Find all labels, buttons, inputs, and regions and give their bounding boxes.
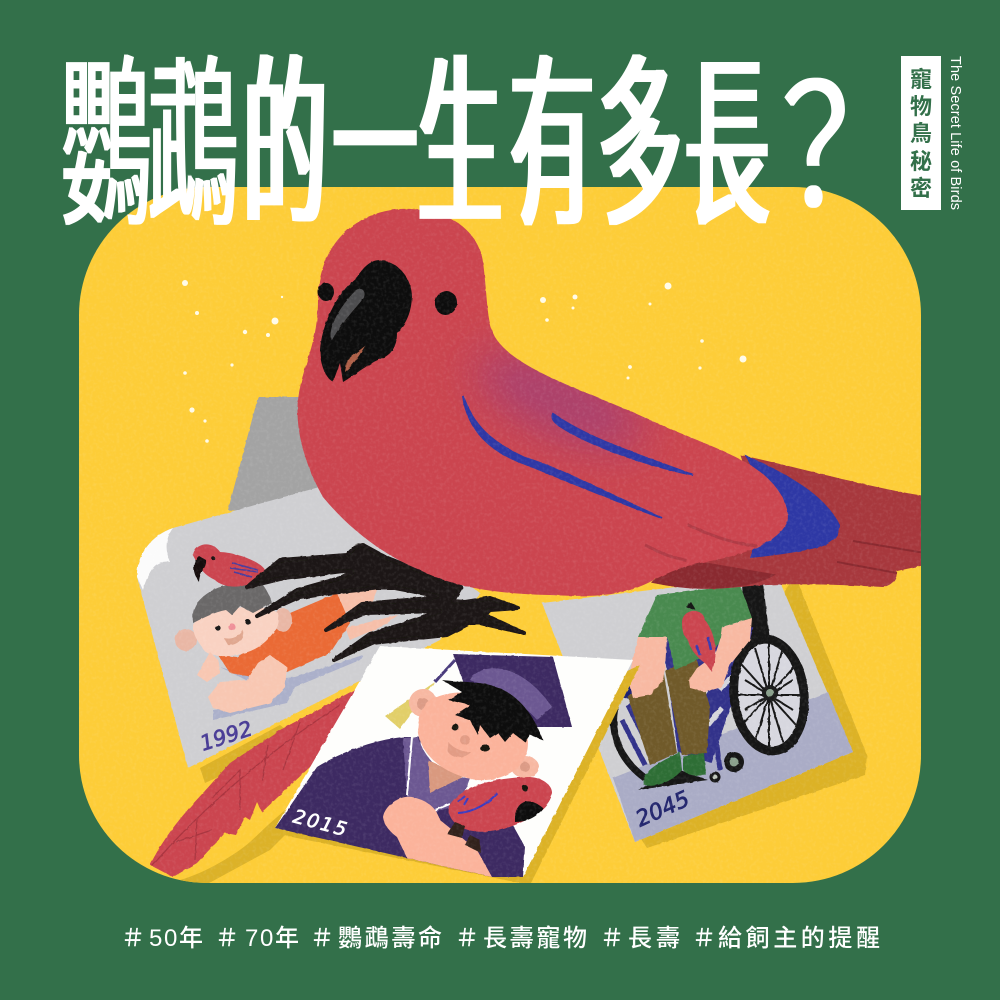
baby legs: [335, 588, 398, 640]
hashtags: ＃: [215, 925, 239, 952]
shoulder tint: [464, 332, 656, 468]
badge text: 秘: [910, 149, 932, 174]
wing line 2: [552, 414, 693, 475]
title dense characters: 鵡: [148, 42, 238, 249]
badge text: [910, 67, 932, 201]
photo 2045 shadow: [635, 575, 867, 848]
hashtags: ＃: [121, 925, 145, 952]
lapel: [403, 737, 470, 813]
badge box: [901, 56, 941, 210]
title open characters: [243, 44, 769, 250]
beak: [320, 260, 412, 382]
title open characters: 有: [510, 44, 594, 250]
title open characters: 一: [333, 44, 417, 250]
fist and arm: [383, 797, 492, 877]
photo 2015 shadow: [282, 665, 640, 885]
title open characters: 長: [685, 44, 769, 250]
hashtags: 給飼主的提醒: [718, 925, 880, 952]
cap: [453, 654, 572, 727]
neck: [428, 760, 463, 793]
right eye: [432, 289, 460, 317]
title: [61, 42, 874, 250]
baby features: [215, 619, 251, 645]
face features: [447, 724, 490, 757]
illustration panel: [79, 187, 925, 888]
hashtags: ＃: [310, 925, 334, 952]
parrot on arm: [448, 777, 552, 832]
talons: [247, 545, 524, 660]
back grey sheet: [228, 396, 318, 511]
floor strip: [613, 692, 853, 842]
hashtags: 50年: [149, 925, 203, 952]
hashtags: 鸚鵡壽命: [338, 925, 442, 952]
hair: [442, 680, 543, 742]
title dense characters: 鸚: [61, 42, 151, 249]
baby face: [193, 607, 279, 656]
baby arms: [197, 652, 287, 713]
green shirt: [638, 585, 752, 670]
photo 1992: [137, 484, 480, 768]
small parrot: [682, 611, 716, 672]
parrot body: [297, 209, 788, 596]
hashtags: ＃: [455, 925, 479, 952]
trousers: [628, 660, 710, 765]
photo sheet: [275, 646, 633, 877]
hashtags: 長壽寵物: [483, 925, 587, 952]
title dense characters: [61, 42, 874, 249]
photo 2045: [542, 575, 853, 842]
paper grain: [79, 187, 921, 883]
hashtags: [121, 925, 880, 952]
wing creases: [645, 525, 757, 560]
baby shadow: [213, 655, 363, 720]
title open characters: 多: [598, 44, 682, 250]
photo sheet: [137, 484, 480, 768]
hashtags: ＃: [692, 925, 716, 952]
baby body: [218, 593, 350, 677]
badge text: 物: [910, 94, 932, 119]
tail details: [653, 541, 925, 588]
year 2045: 2045: [632, 787, 694, 832]
blue flight feathers: [745, 455, 840, 558]
beak highlight: [331, 289, 365, 340]
tongue: [345, 346, 365, 372]
small parrot: [193, 544, 265, 587]
curled corner: [137, 528, 173, 590]
badge text: 鳥: [910, 121, 932, 146]
series english name: The Secret Life of Birds: [947, 56, 963, 210]
hashtags: ＃: [600, 925, 624, 952]
baby hair: [193, 585, 272, 623]
arms: [628, 618, 752, 698]
hashtags: 70年: [245, 925, 299, 952]
badge text: 寵: [910, 67, 932, 92]
ears: [409, 689, 539, 778]
yellow panel: [79, 187, 921, 883]
parrot tail: [653, 455, 925, 589]
title dense characters: ？: [756, 54, 874, 244]
shoes: [644, 752, 706, 786]
title open characters: 的: [243, 44, 327, 250]
wing line 1: [463, 396, 662, 518]
baby ears: [175, 608, 292, 651]
year 2015: 2015: [291, 806, 351, 841]
left eye: [318, 283, 334, 301]
badge text: 密: [910, 176, 932, 201]
series badge: [901, 56, 941, 210]
tassel: [385, 660, 455, 729]
hashtags: 長壽: [628, 925, 680, 952]
year 1992: 1992: [197, 716, 255, 756]
robe: [275, 737, 525, 877]
collar lines: [407, 737, 450, 812]
photo sheet: [542, 575, 853, 842]
face: [418, 693, 528, 780]
feather shadow: [180, 810, 289, 883]
sparkles: [182, 280, 746, 443]
feather: [150, 690, 355, 877]
wheelchair: [614, 583, 810, 790]
title open characters: 生: [418, 44, 502, 250]
photo 2015: [275, 646, 633, 877]
photo 1992 shadow: [200, 725, 284, 783]
